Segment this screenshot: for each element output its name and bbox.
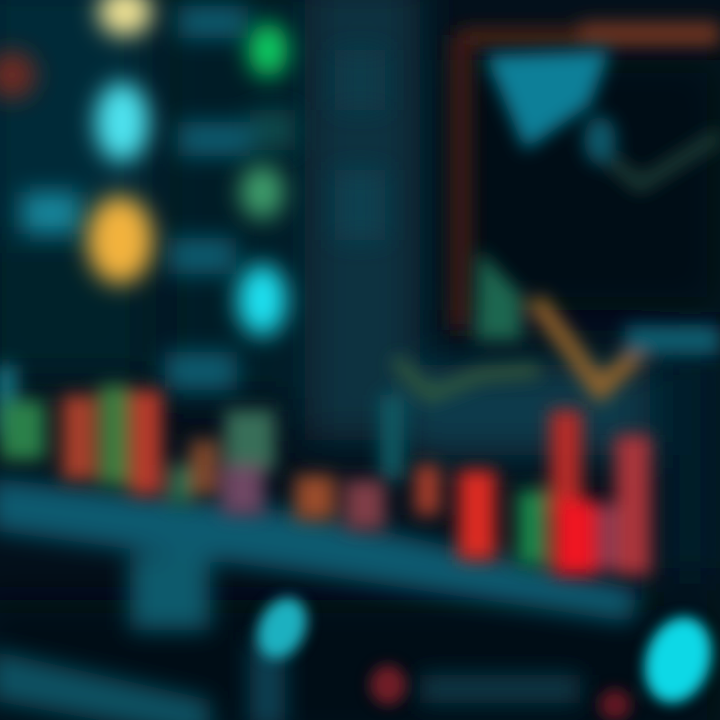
line chart: orange frame — [450, 22, 720, 330]
bottom glowing accents — [248, 589, 720, 720]
glowing indicator lights — [0, 0, 288, 336]
candlestick bars: right — [295, 410, 651, 575]
line chart: teal shape and lines — [380, 50, 720, 480]
column of teal labels — [22, 6, 385, 390]
candlestick bars: left — [0, 365, 275, 515]
shelf: lower teal band — [0, 478, 640, 720]
